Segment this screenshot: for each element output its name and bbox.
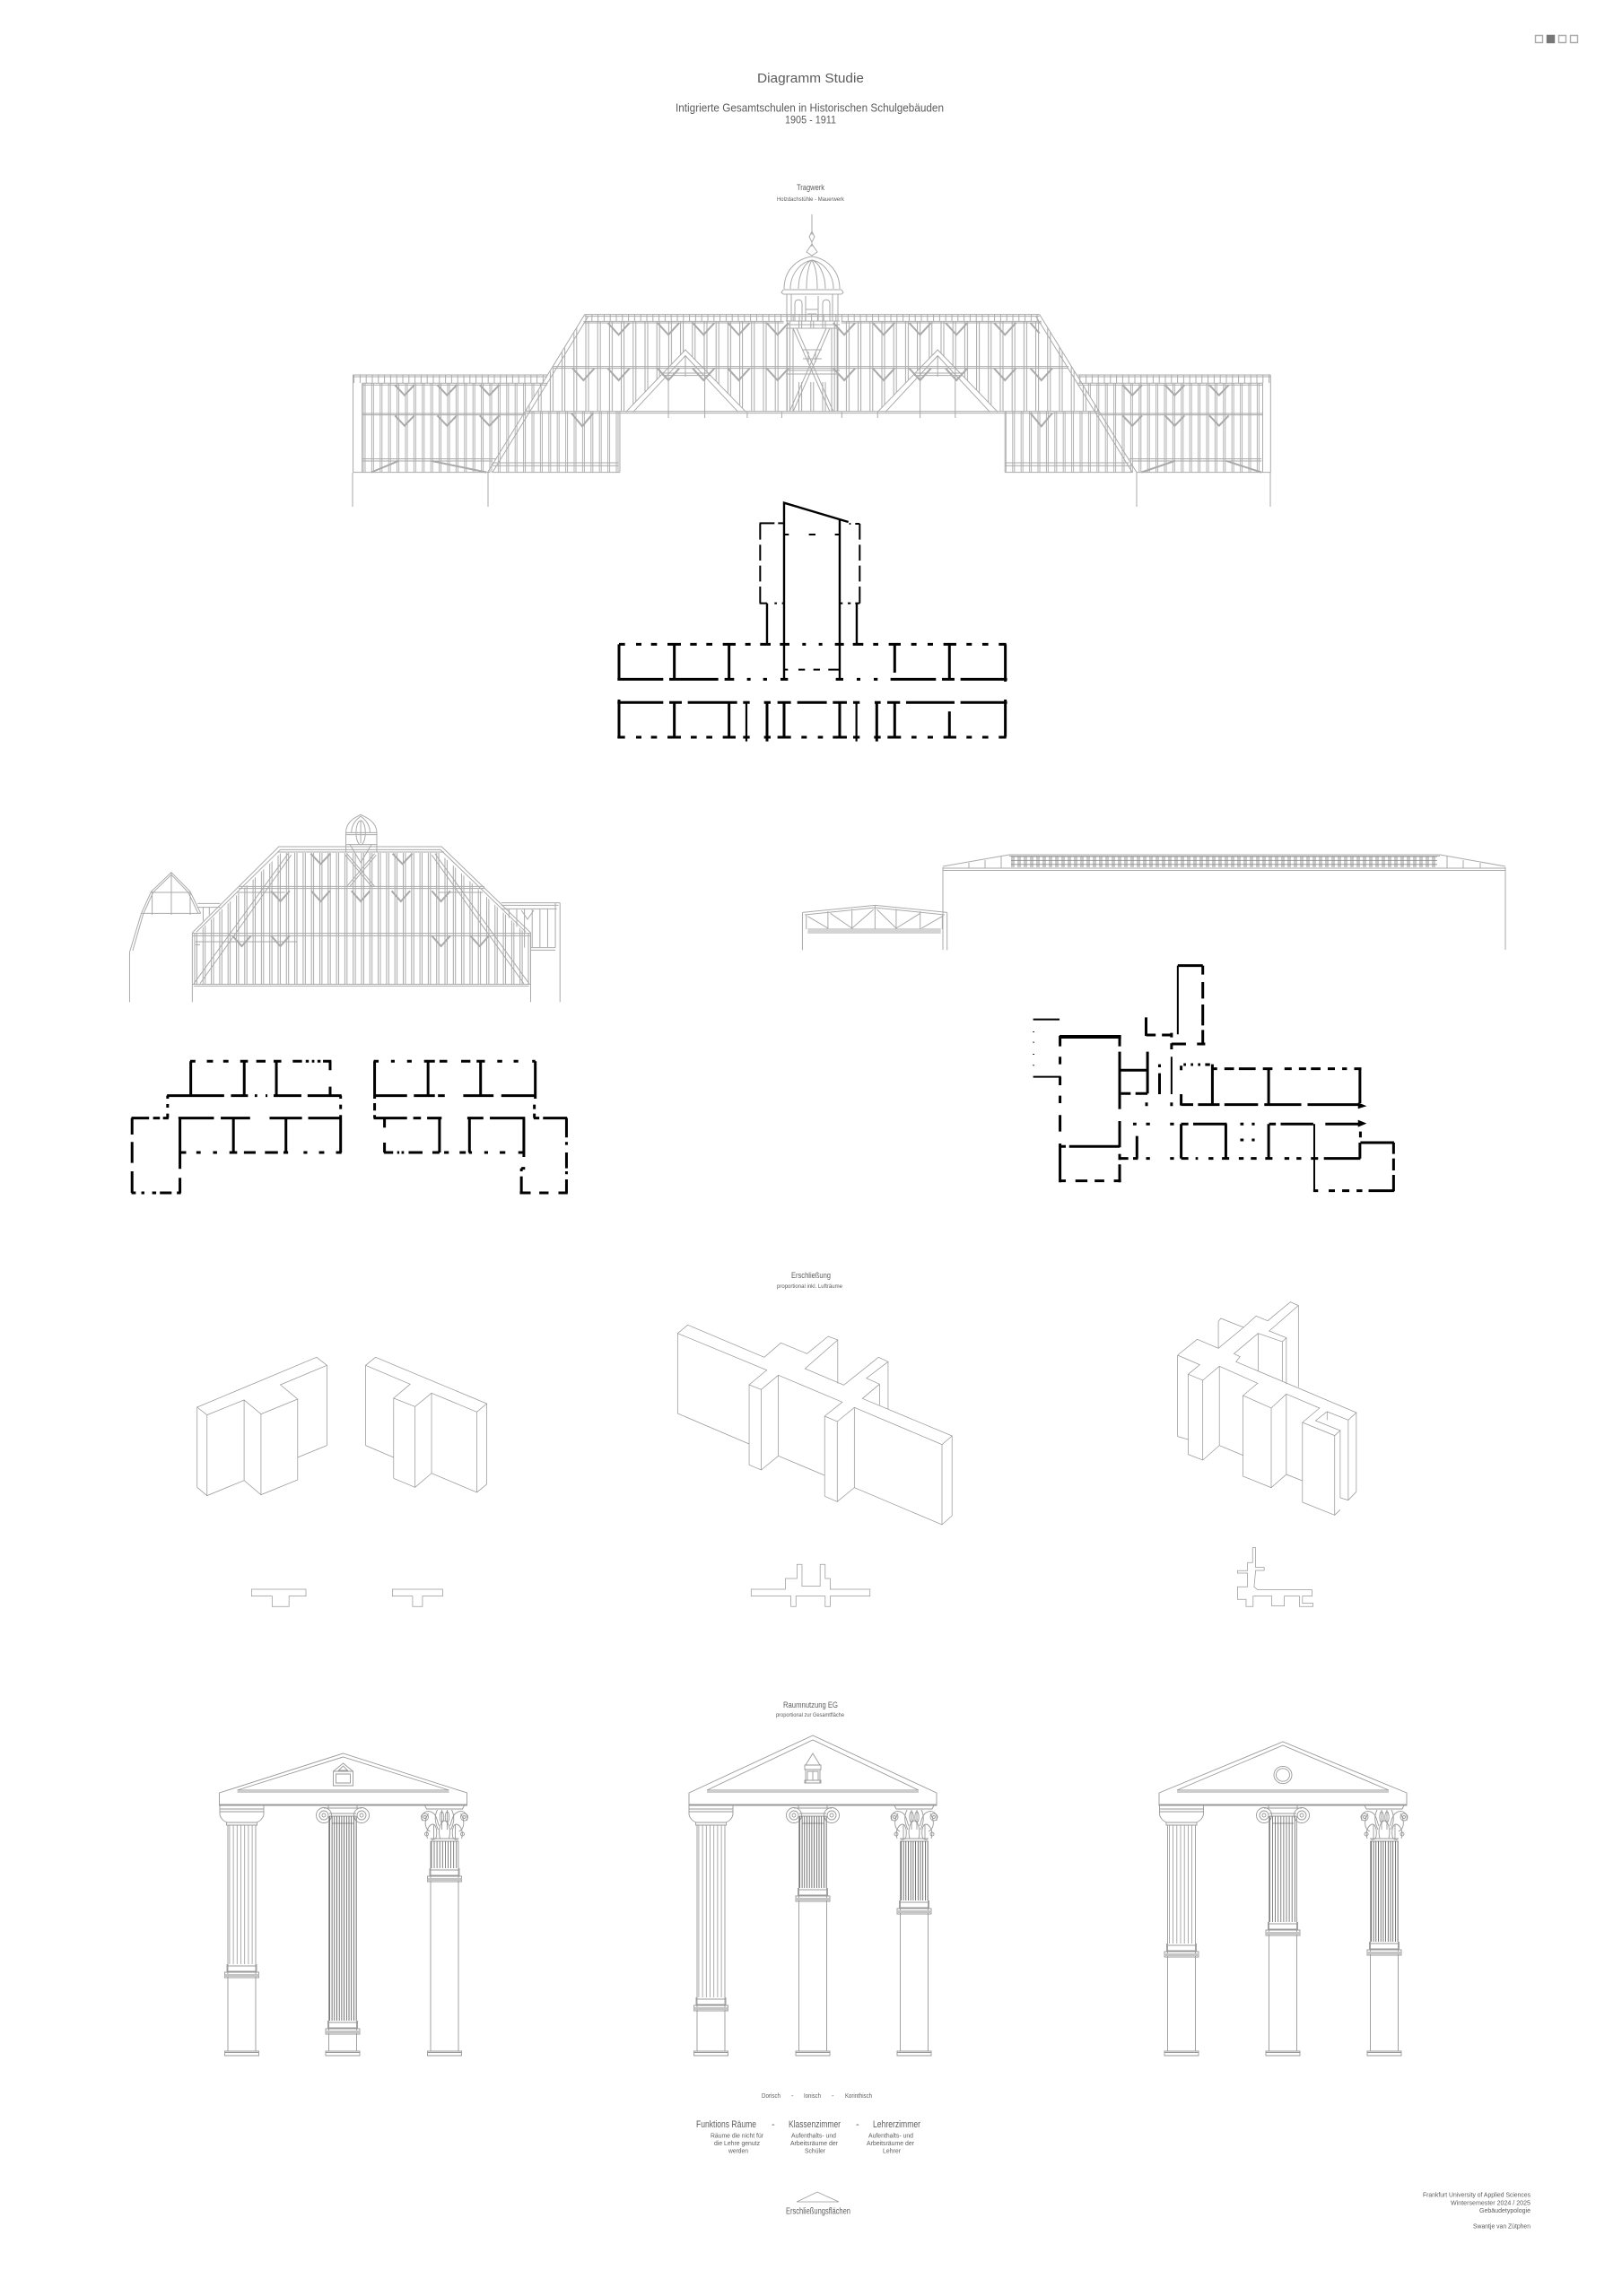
- truss elevation: third building roof: [802, 855, 1505, 950]
- isometric circulation: first building: [197, 1357, 487, 1496]
- corridor plans: first building: [251, 1589, 442, 1606]
- column: corinthian: [422, 1805, 468, 2056]
- legend: room types: Lehrerzimmer: [873, 2119, 920, 2130]
- pediment with turret: [689, 1735, 937, 1805]
- legend: column orders: Korinthisch: [845, 2092, 872, 2100]
- column: corinthian: [1361, 1805, 1408, 2056]
- legend: room types: Lehrer: [883, 2149, 902, 2154]
- legend: room types: Schüler: [805, 2149, 826, 2154]
- subtitle: Intigrierte Gesamtschulen in Historischen Schulgebäuden: [676, 100, 944, 115]
- truss elevation: second building: [129, 814, 560, 1002]
- legend: room types: Räume die nicht für: [711, 2133, 764, 2140]
- legend: room types: die Lehre genutz: [714, 2141, 760, 2147]
- legend: room types: -: [856, 2119, 859, 2130]
- page indicator: [1536, 36, 1577, 43]
- credits: Wintersemester 2024 / 2025: [1451, 2199, 1530, 2206]
- truss elevation: main building: [353, 214, 1270, 507]
- column: ionic: [1256, 1805, 1310, 2056]
- column: ionic: [786, 1805, 840, 2056]
- legend: column orders: Dorisch: [762, 2092, 780, 2100]
- years: 1905 - 1911: [785, 113, 836, 126]
- temple diagram: third building: [1159, 1742, 1408, 2056]
- legend: room types: Aufenthalts- und: [791, 2133, 836, 2140]
- heading: Tragwerk: Tragwerk: [797, 183, 824, 192]
- floor plan: third building: [1033, 966, 1394, 1191]
- pediment with dormer: [219, 1753, 467, 1805]
- credits: Swantje van Zütphen: [1473, 2222, 1530, 2230]
- legend label: circulation areas: Erschließungsflächen: [786, 2206, 850, 2217]
- legend: room types: Arbeitsräume der: [790, 2141, 839, 2147]
- floor plans: second building: [132, 1061, 568, 1193]
- title: Diagramm Studie: [757, 71, 864, 86]
- legend: column orders: [762, 2092, 872, 2100]
- column: doric: [220, 1805, 264, 2056]
- credits: [1423, 2190, 1530, 2230]
- legend: room types: Aufenthalts- und: [868, 2133, 913, 2140]
- column: doric: [1159, 1805, 1204, 2056]
- subheading: Raumnutzung: proportional zur Gesamtfläche: [776, 1712, 844, 1718]
- legend icon: pediment triangle: [797, 2192, 839, 2202]
- legend: column orders: -: [832, 2092, 834, 2100]
- legend: column orders: Ionisch: [804, 2092, 821, 2100]
- subheading: Tragwerk: Holzdachstühle - Mauerwerk: [777, 196, 845, 203]
- legend: room types: Arbeitsräume der: [867, 2141, 915, 2147]
- heading: Raumnutzung: Raumnutzung EG: [783, 1700, 838, 1709]
- corridor plan: third building: [1237, 1548, 1313, 1606]
- subheading: Erschließung: proportional inkl. Lufträume: [777, 1283, 842, 1290]
- floor plan: main building: [617, 503, 1007, 742]
- column: corinthian: [891, 1805, 937, 2056]
- legend: room types: [696, 2119, 920, 2154]
- credits: Gebäudetypologie: [1479, 2206, 1530, 2214]
- legend: column orders: -: [791, 2092, 794, 2100]
- legend: room types: -: [772, 2119, 775, 2130]
- isometric circulation: second building: [677, 1325, 952, 1525]
- temple diagram: first building: [219, 1753, 468, 2056]
- temple diagram: second building: [689, 1735, 937, 2056]
- column: ionic: [316, 1805, 370, 2056]
- credits: Frankfurt University of Applied Sciences: [1423, 2190, 1530, 2199]
- legend: room types: werden: [728, 2149, 748, 2154]
- legend: room types: Klassenzimmer: [789, 2119, 841, 2130]
- isometric circulation: third building: [1178, 1302, 1356, 1515]
- legend: room types: Funktions Räume: [696, 2119, 756, 2130]
- heading: Erschließung: Erschließung: [791, 1271, 831, 1280]
- pediment with oculus: [1159, 1742, 1407, 1805]
- column: doric: [689, 1805, 733, 2056]
- corridor plan: second building: [751, 1564, 870, 1606]
